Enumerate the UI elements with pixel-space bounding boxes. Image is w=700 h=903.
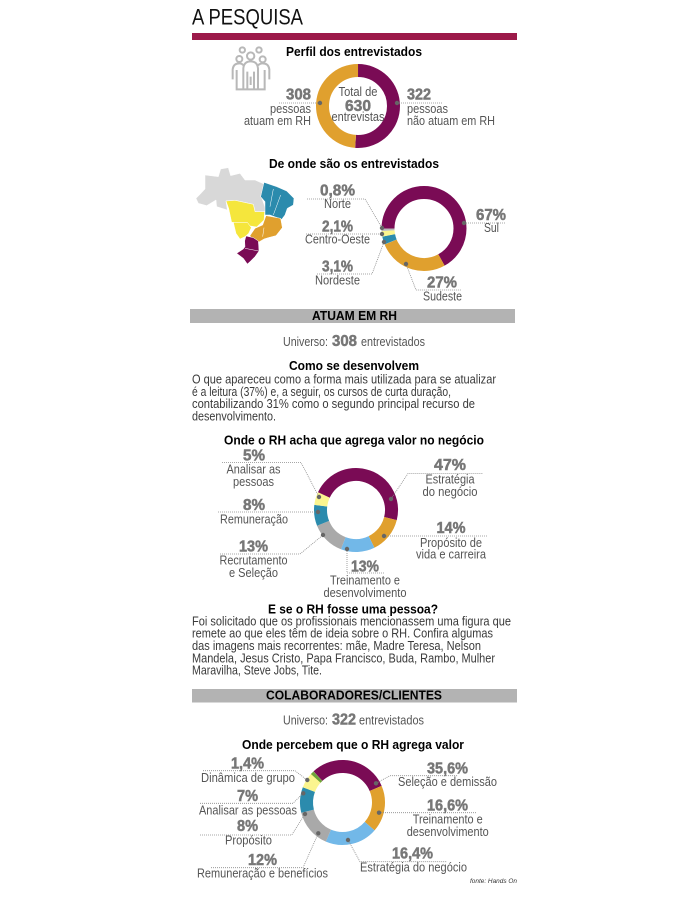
callout: Sudeste: 27% [427, 275, 457, 292]
text block: como se desenvolvem: é a leitura (37%) e, a seguir, os cursos de curta duração, [192, 385, 451, 399]
text block: e se o RH fosse uma pessoa: das imagens mais recorrentes: mãe, Madre Teresa, Nelson [192, 639, 481, 653]
heading: como se desenvolvem: Como se desenvolvem [289, 358, 419, 373]
callout: 308 atuam em RH [244, 86, 322, 128]
section bar: colaboradores/clientes: COLABORADORES/CLIENTES [266, 688, 442, 702]
universo 308: Universo: [283, 335, 328, 349]
icon: group of people [233, 47, 269, 89]
donut center label: Total de [338, 85, 378, 99]
callout: Centro-Oeste [305, 219, 384, 246]
text block: e se o RH fosse uma pessoa [192, 614, 511, 678]
heading: onde percebem: Onde percebem que o RH agrega valor [242, 737, 464, 752]
donut center label: entrevistas [332, 110, 384, 124]
donut center label: 630 [345, 98, 371, 115]
callout: dinâmica de grupo [201, 755, 309, 785]
callout: treinamento e desenvolvimento: desenvolvimento [407, 825, 489, 839]
donut center label [332, 85, 384, 124]
callout: propósito de vida e carreira: vida e carreira [416, 548, 486, 562]
callout: treinamento e desenvolvimento [324, 547, 407, 600]
callout: remuneração e benefícios: 12% [248, 852, 277, 869]
universo 322: entrevistados [359, 714, 424, 728]
text block: como se desenvolvem: desenvolvimento. [192, 409, 276, 423]
title: A PESQUISA [192, 4, 303, 30]
callout: analisar as pessoas: Analisar as pessoas [199, 803, 297, 817]
heading: perfil dos entrevistados: Perfil dos entrevistados [286, 44, 422, 59]
callout: seleção e demissão [374, 760, 497, 789]
callout: propósito [200, 812, 307, 848]
callout: analisar as pessoas: Analisar as [226, 462, 280, 476]
callout: 322 não atuam em RH: não atuam em RH [407, 114, 495, 128]
callout: seleção e demissão: 35,6% [427, 760, 468, 777]
callout: recrutamento e seleção: 13% [239, 539, 268, 556]
callout: Sul [462, 207, 506, 235]
heading: onde o RH acha: Onde o RH acha que agrega valor no negócio [224, 432, 484, 448]
map: Brazil regions [196, 168, 294, 264]
callout: Nordeste: 3,1% [322, 259, 353, 276]
callout: Norte: Norte [324, 197, 351, 211]
text block: e se o RH fosse uma pessoa: Maravilha, Steve Jobs, Tite. [192, 664, 322, 678]
callout: Nordeste: Nordeste [315, 274, 360, 288]
callout: treinamento e desenvolvimento: 16,6% [427, 798, 468, 815]
callout: seleção e demissão: Seleção e demissão [398, 775, 497, 789]
heading: e se o RH fosse uma pessoa: E se o RH fosse uma pessoa? [268, 602, 438, 616]
callout: Centro-Oeste: Centro-Oeste [305, 232, 370, 246]
universo 322: Universo: [283, 714, 328, 728]
callout: treinamento e desenvolvimento: desenvolvimento [324, 586, 407, 600]
donut chart: perfil [320, 68, 396, 144]
callout: 308 atuam em RH: 308 [286, 86, 311, 104]
callout: dinâmica de grupo: 1,4% [231, 755, 264, 772]
donut chart: regiões [375, 180, 473, 277]
callout: propósito de vida e carreira: Propósito de [420, 536, 482, 550]
callout: 308 atuam em RH: pessoas [270, 102, 311, 116]
section bar: colaboradores/clientes [192, 688, 517, 702]
callout: Nordeste [315, 240, 386, 288]
universo 308 [283, 333, 425, 350]
callout: Sudeste: Sudeste [423, 290, 462, 304]
section bar: atuam em RH: ATUAM EM RH [312, 309, 397, 323]
callout: Centro-Oeste: 2,1% [322, 219, 353, 236]
callout: Sudeste [404, 262, 462, 304]
callout: remuneração: 8% [243, 497, 265, 514]
callout: estratégia do negócio: do negócio [422, 485, 478, 499]
callout: remuneração e benefícios [197, 831, 328, 880]
callout: 308 atuam em RH: atuam em RH [244, 114, 311, 128]
callout: recrutamento e seleção: Recrutamento [220, 554, 288, 568]
callout: 322 não atuam em RH: 322 [407, 86, 431, 104]
callout: Norte: 0,8% [320, 183, 355, 200]
callout: analisar as pessoas [222, 448, 321, 499]
text block: como se desenvolvem: contabilizando 31% como o segundo principal recurso de [192, 397, 475, 411]
callout: remuneração e benefícios: Remuneração e benefícios [197, 866, 328, 880]
callout: 322 não atuam em RH [395, 86, 495, 128]
callout: remuneração [218, 497, 320, 526]
callout: 322 não atuam em RH: pessoas [407, 102, 448, 116]
callout: recrutamento e seleção [220, 533, 325, 580]
callout: propósito: Propósito [225, 834, 272, 848]
callout: analisar as pessoas: 5% [243, 448, 265, 465]
universo 322: 322 [332, 712, 356, 728]
section bar: atuam em RH [190, 309, 515, 323]
universo 308: 308 [332, 333, 357, 350]
universo 308: entrevistados [361, 335, 425, 349]
text block: como se desenvolvem [192, 372, 496, 423]
donut chart: colaboradores [292, 752, 393, 853]
callout: treinamento e desenvolvimento: Treinamento e [413, 812, 483, 826]
callout: analisar as pessoas: 7% [237, 788, 258, 805]
text block: e se o RH fosse uma pessoa: Foi solicitado que os profissionais mencionassem uma figura que [192, 614, 511, 628]
callout: dinâmica de grupo: Dinâmica de grupo [201, 771, 295, 785]
callout: remuneração: Remuneração [220, 512, 288, 526]
callout: propósito de vida e carreira [382, 520, 487, 562]
callout: Sul: Sul [484, 221, 499, 235]
callout: estratégia do negócio [346, 838, 467, 874]
text block: como se desenvolvem: O que apareceu como a forma mais utilizada para se atualizar [192, 372, 496, 386]
callout: analisar as pessoas [199, 788, 305, 817]
text block: e se o RH fosse uma pessoa: Mandela, Jesus Cristo, Papa Francisco, Buda, Rambo, Mulher [192, 651, 495, 665]
callout: estratégia do negócio [389, 457, 483, 501]
callout: Norte [307, 183, 384, 230]
callout: propósito: 8% [237, 818, 258, 835]
callout: estratégia do negócio: 47% [434, 457, 466, 474]
callout: Sul: 67% [476, 207, 506, 224]
source note: fonte: Hands On [470, 878, 517, 885]
heading: de onde são: De onde são os entrevistados [269, 156, 439, 171]
callout: estratégia do negócio: Estratégia [426, 472, 475, 486]
universo 322 [283, 712, 424, 728]
callout: estratégia do negócio: Estratégia do negócio [360, 860, 467, 874]
callout: treinamento e desenvolvimento: Treinamento e [330, 574, 400, 588]
donut chart: RH agrega valor [309, 463, 403, 557]
callout: recrutamento e seleção: e Seleção [229, 566, 278, 580]
callout: treinamento e desenvolvimento [377, 798, 489, 839]
callout: treinamento e desenvolvimento: 13% [351, 559, 379, 576]
callout: estratégia do negócio: 16,4% [392, 845, 433, 862]
text block: e se o RH fosse uma pessoa: remete ao que eles têm de ideia sobre o RH. Confira algumas [192, 627, 493, 641]
title bar [192, 33, 517, 40]
callout: propósito de vida e carreira: 14% [436, 520, 466, 537]
callout: analisar as pessoas: pessoas [233, 475, 274, 489]
